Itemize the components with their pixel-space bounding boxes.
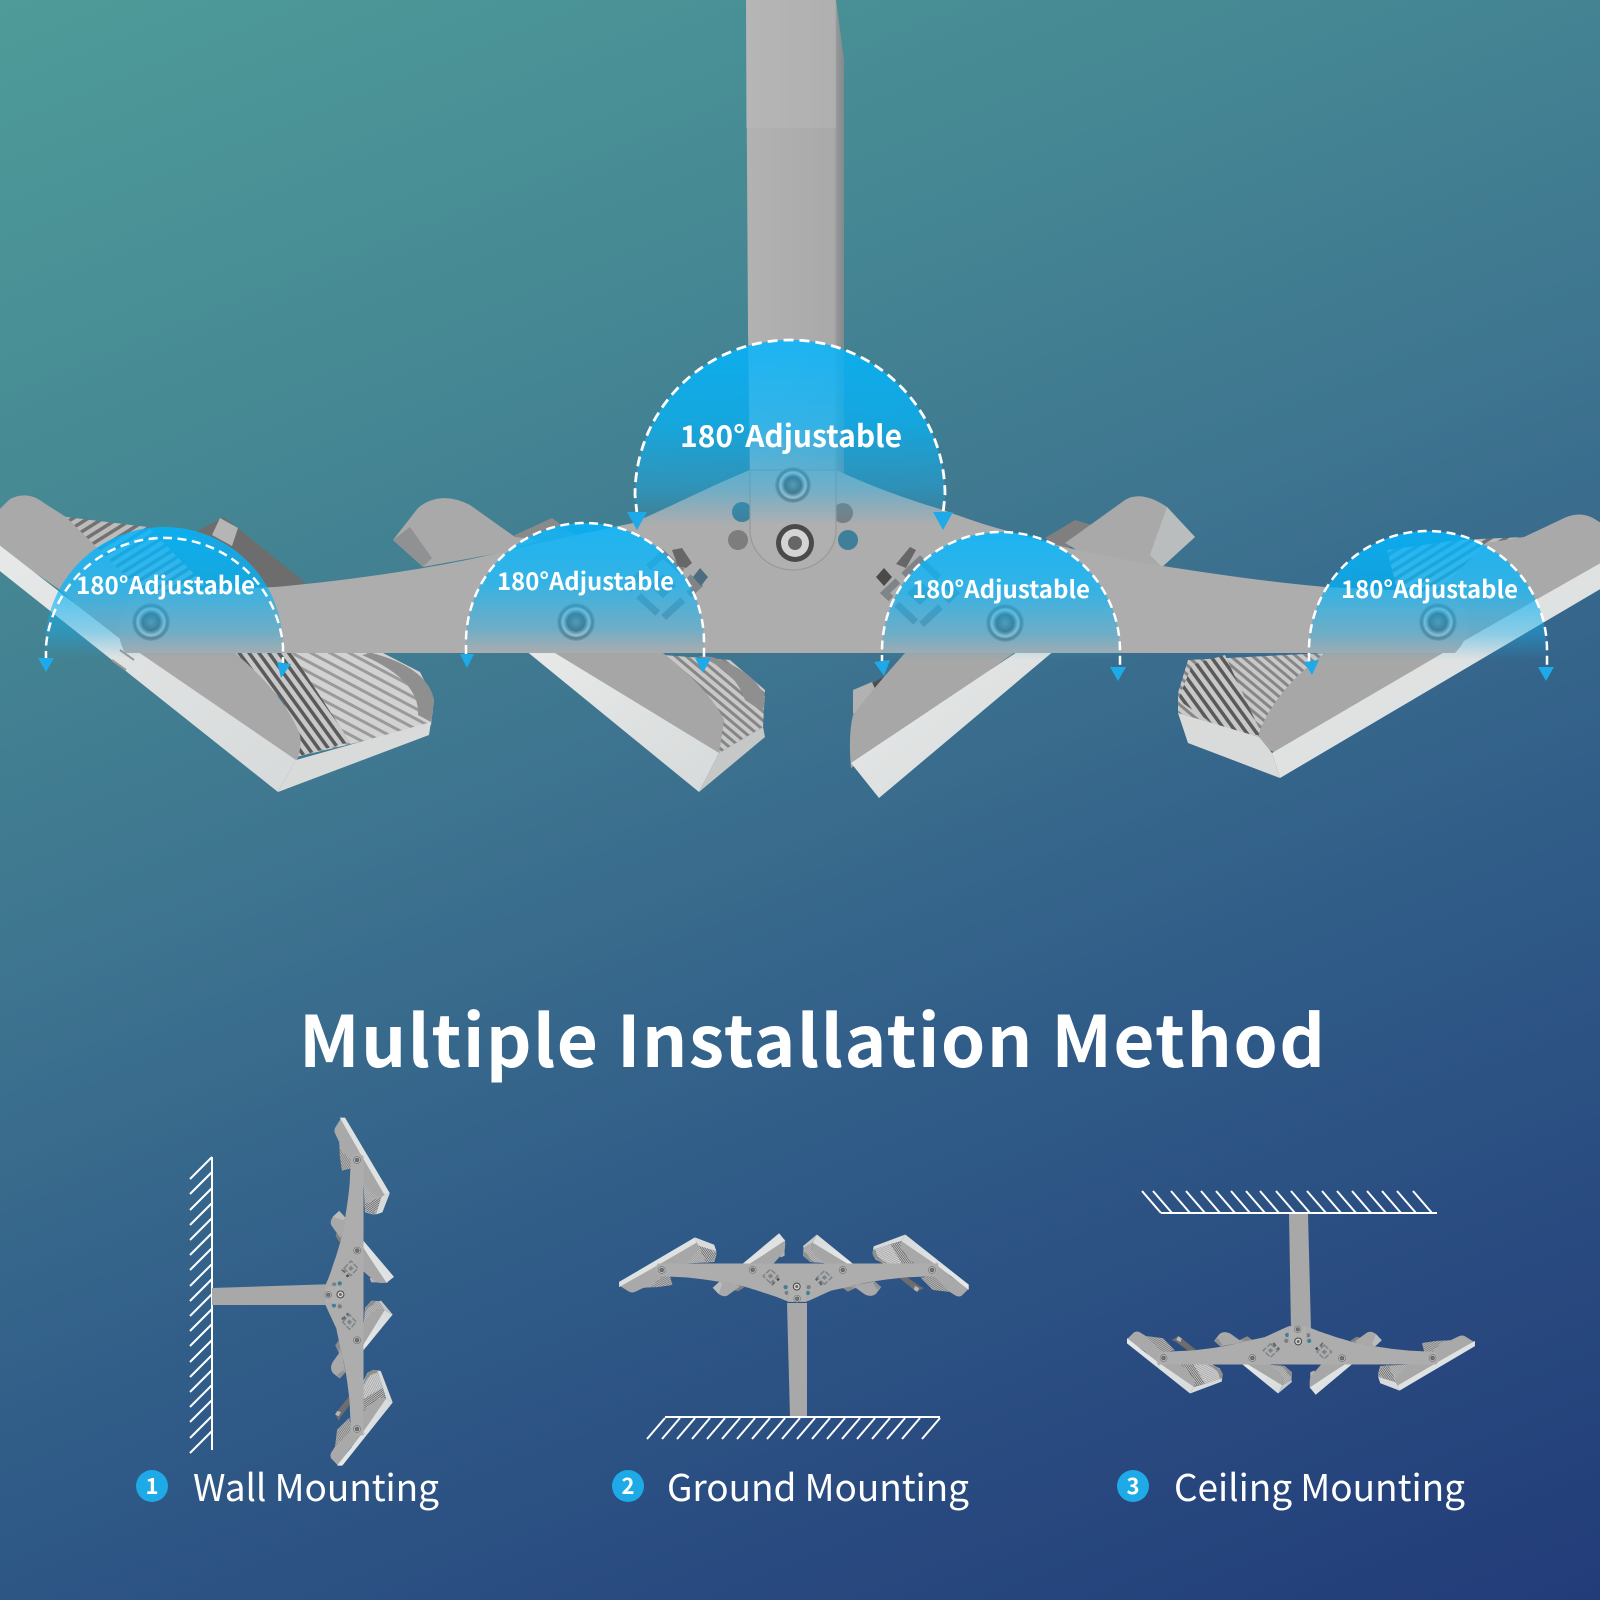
label: ceiling mounting: Ceiling Mounting — [1174, 1458, 1465, 1512]
slots and holes — [672, 502, 916, 586]
label: wall mounting: 1 — [146, 1469, 158, 1501]
ceiling fixture — [1127, 1326, 1475, 1395]
wall fixture — [324, 1118, 394, 1466]
label: wall mounting: Wall Mounting — [193, 1458, 439, 1512]
lamp: outer right — [1178, 514, 1600, 778]
adjustment arc: inner right lamp: 180°Adjustable — [912, 570, 1090, 605]
label: ground mounting: Ground Mounting — [667, 1458, 969, 1512]
ground fixture — [619, 1233, 969, 1302]
adjustment arc: outer right lamp: 180°Adjustable — [1341, 570, 1518, 605]
cross bar — [119, 470, 1468, 653]
adjustment arc: outer left lamp: 180°Adjustable — [76, 566, 255, 601]
ceiling pole — [1289, 1214, 1311, 1330]
floodlight fixture: four lamps on cross bar — [0, 467, 1600, 798]
pivot bracket — [750, 470, 836, 570]
wall arm — [212, 1284, 340, 1305]
adjustment arc: outer left lamp — [38, 527, 291, 678]
adjustment arc: inner left lamp: 180°Adjustable — [497, 562, 674, 597]
wall hatch — [190, 1157, 212, 1453]
lamp: inner left — [393, 498, 765, 792]
ground hatch — [647, 1417, 940, 1439]
title: Multiple Installation Method — [299, 986, 1325, 1088]
label: ceiling mounting: 3 — [1127, 1469, 1139, 1501]
bolts — [132, 467, 1457, 642]
adjustment arc: centre pole — [627, 340, 953, 530]
product photo: main pole — [746, 0, 844, 480]
diagram: wall mounting — [190, 1118, 394, 1466]
adjustment arc: centre pole: 180°Adjustable — [680, 412, 902, 456]
ceiling hatch — [1142, 1191, 1437, 1213]
diagram: ceiling mounting — [1127, 1191, 1475, 1395]
lamp: outer left — [0, 495, 434, 792]
label: ground mounting: 2 — [622, 1469, 634, 1501]
adjustment arc: outer right lamp — [1304, 531, 1554, 681]
lamp: inner right — [850, 496, 1195, 798]
adjustment arc: inner right lamp — [874, 532, 1126, 681]
ground pole — [787, 1303, 807, 1417]
diamond marks — [628, 554, 955, 626]
adjustment arc: inner left lamp — [460, 523, 711, 673]
diagram: ground mounting — [619, 1233, 969, 1439]
